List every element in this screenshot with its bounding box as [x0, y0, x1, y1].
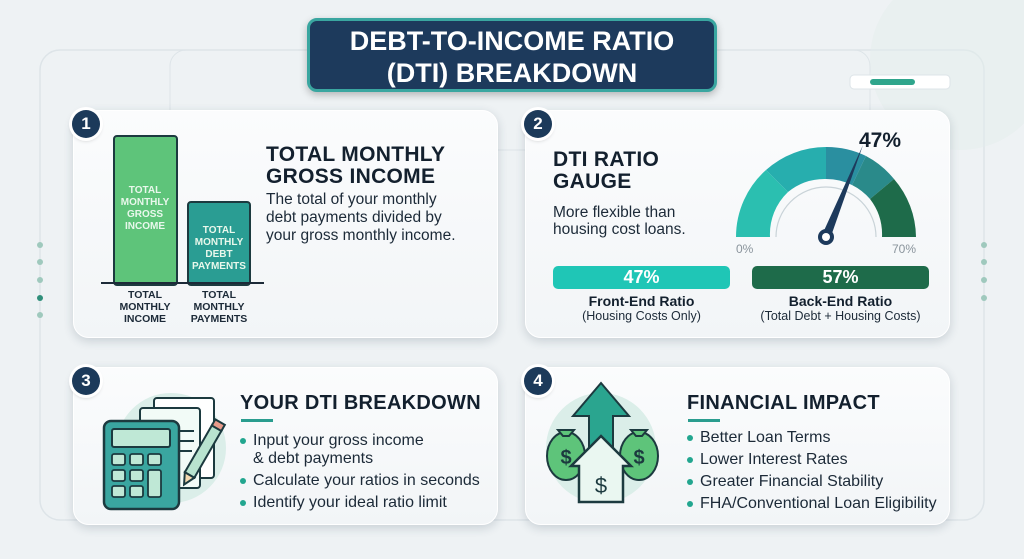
front-end ratio — [553, 266, 730, 323]
title: (DTI) BREAKDOWN — [387, 58, 637, 88]
gauge chart: 0% — [736, 242, 754, 256]
description: your gross monthly income. — [266, 227, 456, 244]
front-end ratio: Front-End Ratio — [589, 293, 694, 309]
bar chart: TOTAL — [128, 289, 163, 301]
bar chart: MONTHLY — [194, 301, 244, 313]
bar chart: MONTHLY — [121, 197, 170, 208]
badge 1: 1 — [81, 114, 91, 133]
back-end ratio: (Total Debt + Housing Costs) — [760, 309, 921, 323]
heading: GROSS INCOME — [266, 165, 435, 188]
bullet list — [687, 429, 937, 512]
heading: YOUR DTI BREAKDOWN — [240, 392, 481, 414]
bar chart: TOTAL — [202, 289, 237, 301]
gauge chart — [736, 129, 916, 256]
bar chart: GROSS — [127, 209, 163, 220]
bullet list: Lower Interest Rates — [700, 451, 848, 468]
bullet list: Calculate your ratios in seconds — [253, 472, 480, 489]
heading — [266, 143, 445, 188]
bar chart — [101, 135, 264, 325]
bar chart: PAYMENTS — [191, 313, 247, 325]
gauge chart: 70% — [892, 242, 916, 256]
back-end ratio: 57% — [822, 267, 859, 287]
heading: GAUGE — [553, 170, 632, 193]
bar chart: MONTHLY — [120, 301, 170, 313]
description: housing cost loans. — [553, 221, 686, 238]
panel 3: your DTI breakdown — [73, 367, 498, 525]
gauge chart: 47% — [859, 129, 901, 152]
badge 1 — [72, 110, 100, 138]
bullet list: Input your gross income — [253, 432, 424, 449]
badge 3 — [72, 367, 100, 395]
heading: TOTAL MONTHLY — [266, 143, 445, 166]
heading — [553, 148, 659, 193]
description — [266, 191, 456, 244]
icon: money bags and house — [546, 382, 659, 504]
icon: money bags and house: $ — [560, 447, 572, 469]
heading: FINANCIAL IMPACT — [687, 392, 880, 414]
description: The total of your monthly — [266, 191, 437, 208]
badge 3: 3 — [81, 371, 91, 390]
heading: DTI RATIO — [553, 148, 659, 171]
front-end ratio: 47% — [623, 267, 660, 287]
bar chart: INCOME — [124, 313, 166, 325]
badge 4: 4 — [533, 371, 543, 390]
badge 4 — [524, 367, 552, 395]
bullet list: Better Loan Terms — [700, 429, 830, 446]
panel 1: total monthly gross income — [73, 110, 498, 338]
bullet list: & debt payments — [253, 450, 373, 467]
bullet list: Identify your ideal ratio limit — [253, 494, 447, 511]
icon: calculator — [102, 393, 226, 510]
description: More flexible than — [553, 204, 675, 221]
bullet list: FHA/Conventional Loan Eligibility — [700, 495, 937, 512]
title: DEBT-TO-INCOME RATIO — [350, 26, 674, 56]
icon: money bags and house: $ — [633, 447, 645, 469]
panel 2: gauge — [525, 110, 950, 338]
bar chart: TOTAL — [129, 185, 161, 196]
bar chart: TOTAL — [203, 225, 235, 236]
description: debt payments divided by — [266, 209, 442, 226]
bullet list — [240, 432, 480, 511]
description — [553, 204, 686, 238]
badge 2: 2 — [533, 114, 543, 133]
icon: money bags and house: $ — [595, 473, 607, 498]
bar chart: PAYMENTS — [192, 261, 246, 272]
bar chart: INCOME — [125, 221, 165, 232]
bar chart: DEBT — [205, 249, 233, 260]
back-end ratio: Back-End Ratio — [789, 293, 892, 309]
back-end ratio — [752, 266, 929, 323]
title — [307, 18, 717, 92]
bar chart: MONTHLY — [195, 237, 244, 248]
badge 2 — [524, 110, 552, 138]
bullet list: Greater Financial Stability — [700, 473, 883, 490]
front-end ratio: (Housing Costs Only) — [582, 309, 701, 323]
panel 4: financial impact — [525, 367, 950, 525]
